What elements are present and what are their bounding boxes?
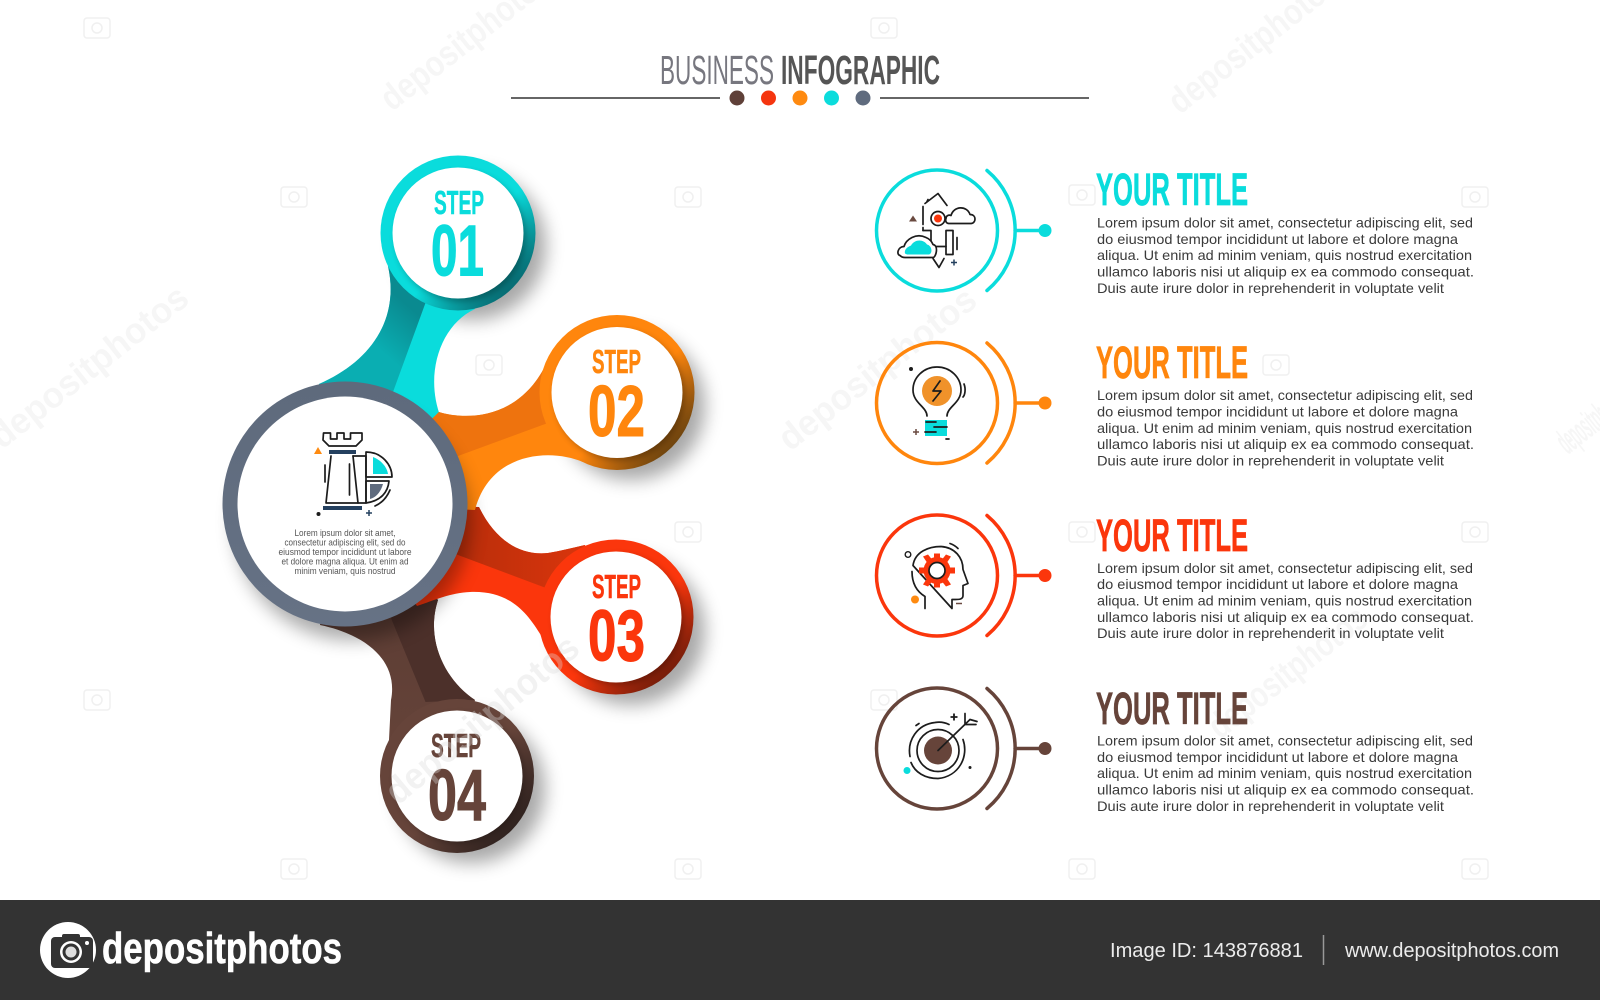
row 2 body text: do eiusmod tempor incididunt ut labore et dolore magna xyxy=(1097,404,1458,420)
centre text: et dolore magna aliqua. Ut enim ad xyxy=(282,556,408,566)
icon: chess rook with pie chart xyxy=(314,433,392,516)
row 4 body text xyxy=(1097,734,1474,814)
ring shadows xyxy=(397,172,705,863)
diagram: step connectors and circles xyxy=(222,156,705,863)
icon: rocket and clouds xyxy=(898,194,975,268)
centre text: Lorem ipsum dolor sit amet, xyxy=(294,528,396,538)
logo wordmark: depositphotos xyxy=(102,924,342,973)
image id: Image ID: 143876881 xyxy=(1110,939,1303,962)
icon: head and gear xyxy=(905,544,968,608)
background watermark: depositphotos xyxy=(770,278,984,458)
step 2 circle xyxy=(540,315,694,470)
row 2 body text xyxy=(1097,388,1474,468)
row 1 body text: Lorem ipsum dolor sit amet, consectetur adipiscing elit, sed xyxy=(1097,216,1473,230)
title: BUSINESS xyxy=(660,47,774,93)
centre text: eiusmod tempor incididunt ut labore xyxy=(278,547,412,557)
row 3 title: YOUR TITLE xyxy=(1096,510,1248,561)
row 3: red item xyxy=(876,510,1474,641)
icon ring: target xyxy=(876,688,1052,809)
background watermark: depositphotos xyxy=(1200,597,1375,746)
title divider with colour dots xyxy=(511,90,1089,106)
row 2: orange item xyxy=(876,337,1474,468)
row 3 body text xyxy=(1097,561,1474,641)
centre text xyxy=(278,528,412,576)
step 4 circle: 04 xyxy=(428,756,486,836)
icon ring: rocket xyxy=(876,170,1052,291)
row 1 body text: do eiusmod tempor incididunt ut labore et dolore magna xyxy=(1097,232,1458,247)
row 2 body text: aliqua. Ut enim ad minim veniam, quis nostrud exercitation xyxy=(1097,421,1472,436)
connector: step 1 teal xyxy=(319,233,475,504)
row 1: teal item xyxy=(876,164,1474,296)
step 3 circle: 03 xyxy=(588,596,645,676)
step 1 circle: STEP xyxy=(434,184,484,221)
centre circle shadow xyxy=(234,404,470,640)
title: INFOGRAPHIC xyxy=(781,47,940,93)
row 1 body text: aliqua. Ut enim ad minim veniam, quis nostrud exercitation xyxy=(1097,248,1472,263)
row 4 body text: Duis aute irure dolor in reprehenderit in voluptate velit xyxy=(1097,799,1444,814)
icon: camera logo xyxy=(40,922,96,978)
diagram watermark: depositphotos xyxy=(377,626,587,812)
icon ring: light bulb xyxy=(876,342,1052,464)
icon: target with arrow xyxy=(904,714,977,778)
row 4 body text: Lorem ipsum dolor sit amet, consectetur adipiscing elit, sed xyxy=(1097,734,1473,748)
row 2 body text: Lorem ipsum dolor sit amet, consectetur adipiscing elit, sed xyxy=(1097,388,1473,403)
centre text: minim veniam, quis nostrud xyxy=(294,566,396,576)
row 3 body text: do eiusmod tempor incididunt ut labore et dolore magna xyxy=(1097,577,1458,592)
row 4: brown item xyxy=(876,683,1474,814)
step 3 circle: STEP xyxy=(592,568,641,605)
row 1 body text: Duis aute irure dolor in reprehenderit in voluptate velit xyxy=(1097,281,1444,296)
row 4 title: YOUR TITLE xyxy=(1096,683,1248,734)
connector: step 3 red xyxy=(345,504,616,660)
step 4 circle: STEP xyxy=(431,727,481,764)
website: www.depositphotos.com xyxy=(1344,939,1559,962)
row 1 title: YOUR TITLE xyxy=(1096,164,1248,215)
centre circle xyxy=(222,382,468,626)
row 4 body text: ullamco laboris nisi ut aliquip ex ea commodo consequat. xyxy=(1097,782,1474,798)
step 1 circle xyxy=(380,156,536,310)
step 4 circle xyxy=(380,699,534,853)
footer bar xyxy=(0,900,1600,1000)
row 4 body text: aliqua. Ut enim ad minim veniam, quis nostrud exercitation xyxy=(1097,766,1472,781)
connector: step 2 orange xyxy=(345,370,617,510)
icon: bulb xyxy=(909,367,965,439)
row 3 body text: Lorem ipsum dolor sit amet, consectetur adipiscing elit, sed xyxy=(1097,561,1473,576)
row 2 title: YOUR TITLE xyxy=(1096,337,1248,388)
icon ring: head with gear xyxy=(876,515,1052,636)
row 3 body text: ullamco laboris nisi ut aliquip ex ea commodo consequat. xyxy=(1097,610,1474,625)
step 1 circle: 01 xyxy=(431,212,484,292)
row 2 body text: Duis aute irure dolor in reprehenderit in voluptate velit xyxy=(1097,454,1444,468)
connector: step 4 brown xyxy=(320,504,475,776)
step 3 circle xyxy=(538,540,694,694)
row 3 body text: Duis aute irure dolor in reprehenderit in voluptate velit xyxy=(1097,626,1444,641)
row 2 body text: ullamco laboris nisi ut aliquip ex ea commodo consequat. xyxy=(1097,437,1474,452)
row 4 body text: do eiusmod tempor incididunt ut labore et dolore magna xyxy=(1097,750,1458,765)
row 1 body text xyxy=(1097,216,1474,296)
centre text: consectetur adipiscing elit, sed do xyxy=(284,538,406,548)
row 1 body text: ullamco laboris nisi ut aliquip ex ea commodo consequat. xyxy=(1097,264,1474,280)
step 2 circle: STEP xyxy=(592,343,641,380)
step 2 circle: 02 xyxy=(588,372,645,452)
row 3 body text: aliqua. Ut enim ad minim veniam, quis nostrud exercitation xyxy=(1097,594,1472,608)
